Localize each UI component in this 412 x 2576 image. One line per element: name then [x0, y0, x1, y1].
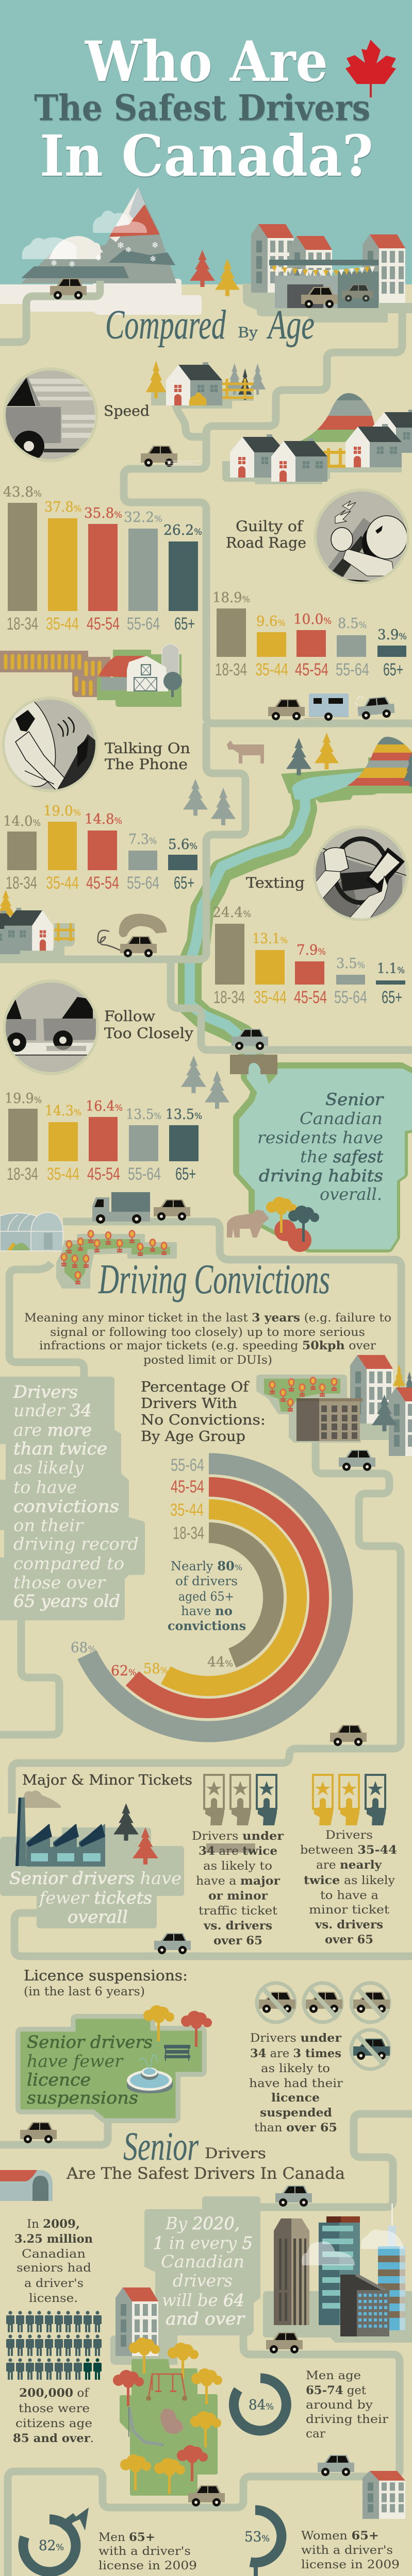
donut: 82 percent with male symbol: 82%	[39, 2538, 64, 2554]
text: drivers 35-44 tickets: to have a	[320, 1889, 378, 1902]
panel: drivers under 34: convictions	[13, 1496, 119, 1516]
radial bar chart: no convictions by age	[71, 1455, 342, 1732]
text: drivers under 34 tickets: vs. drivers	[203, 1919, 272, 1933]
bar chart: road rage: 10.0%	[293, 612, 332, 628]
bar chart: follow too closely	[5, 1091, 202, 1184]
bar chart: follow too closely: 16.4%	[86, 1098, 123, 1114]
heading: compared by age: Age	[266, 302, 315, 348]
callout: senior canadian residents: Canadian	[300, 1109, 383, 1128]
callout: senior canadian residents: residents have	[257, 1128, 383, 1147]
car with speed lines	[141, 446, 201, 467]
text: men age 65-74	[306, 2369, 389, 2441]
text: definition of convictions: Meaning any minor ticket in the last 3 years (e.g. failure to	[24, 1311, 391, 1325]
text: drivers under 34 suspensions: suspended	[260, 2106, 332, 2120]
callout: senior canadian residents: Senior	[325, 1090, 384, 1109]
panel: senior drivers fewer tickets	[0, 1827, 184, 1928]
bar chart: texting: 45-54	[294, 988, 327, 1007]
bar chart: follow too closely: 65+	[175, 1164, 196, 1184]
bridge	[230, 1055, 277, 1074]
grey car	[275, 2185, 312, 2207]
green bank at the hill	[281, 757, 412, 803]
panel: speed	[5, 369, 98, 462]
text: drivers under 34 tickets: or minor	[208, 1889, 268, 1903]
text: 200,000 of those: 85 and over.	[13, 2432, 94, 2445]
road platform under garage	[244, 284, 412, 321]
heading: compared by age: Compared	[105, 302, 226, 348]
donut: 53 percent with female symbol	[244, 2510, 282, 2576]
bar chart: talking on the phone: 14.8%	[85, 811, 122, 827]
bar chart: follow too closely: 13.5%	[166, 1107, 202, 1123]
garage	[269, 260, 378, 308]
text: drivers 35-44 tickets: over 65	[325, 1933, 373, 1946]
text: nearly 80 percent: convictions	[168, 1618, 246, 1633]
text: 200,000 of those: those were	[19, 2402, 90, 2415]
text: drivers 35-44 tickets: are nearly	[316, 1858, 382, 1872]
label: talking on the phone: The Phone	[105, 756, 188, 773]
label: follow too closely: Follow	[104, 1008, 155, 1025]
bar chart: follow too closely: 35-44	[47, 1164, 79, 1184]
panel: drivers under 34: are more	[13, 1420, 92, 1440]
text: drivers under 34 suspensions: Drivers under	[250, 2031, 341, 2045]
label: talking on the phone: Talking On	[105, 740, 190, 757]
label: texting: Texting	[246, 874, 305, 891]
text: nearly 80 percent: of drivers	[175, 1574, 238, 1588]
panel: road rage	[315, 490, 408, 585]
factory	[15, 1790, 255, 1867]
heading: compared by age: By	[238, 324, 258, 341]
bar chart: speed	[3, 484, 202, 634]
heading: senior drivers are the safest: Drivers	[205, 2145, 266, 2162]
lake	[239, 1061, 412, 1248]
snowy ground	[0, 279, 202, 315]
title: In Canada?	[40, 123, 373, 189]
icon: phone handset and car	[98, 914, 166, 957]
panel: drivers under 34: than twice	[13, 1438, 107, 1459]
heading: percentage of drivers: Percentage Of	[141, 1379, 250, 1395]
panel: by 2020: 1 in every 5	[153, 2233, 253, 2253]
heading: percentage of drivers: No Convictions:	[141, 1412, 266, 1428]
grey trees	[183, 779, 236, 825]
text: men 65+: with a driver's	[98, 2545, 191, 2558]
label: road rage	[226, 518, 306, 551]
text: drivers under 34 tickets: 34 are twice	[199, 1844, 277, 1858]
text: women 65+	[301, 2529, 400, 2571]
label: road rage: Guilty of	[236, 518, 304, 535]
text: men 65+: license in 2009	[98, 2560, 197, 2572]
text: definition of convictions: infractions or major tickets (e.g. speeding 50kph over	[39, 1339, 376, 1352]
bar chart: talking on the phone: 7.3%	[128, 832, 157, 848]
farm	[0, 644, 182, 707]
grey car	[154, 1933, 191, 1954]
bar chart: texting: 13.1%	[252, 931, 288, 947]
text: in 2009: Canadian	[22, 2248, 86, 2261]
callout: senior canadian residents	[257, 1090, 384, 1204]
callout: senior canadian residents: driving habits	[259, 1166, 383, 1185]
panel: follow too closely	[4, 981, 100, 1074]
panel: by 2020: By 2020,	[165, 2213, 240, 2233]
icon: maple leaf	[345, 40, 396, 97]
text: senior drivers fewer tickets: overall	[68, 1907, 128, 1927]
text: drivers 35-44 tickets: Drivers	[325, 1829, 373, 1842]
bar chart: texting	[212, 905, 405, 1007]
panel: drivers under 34: compared to	[13, 1553, 124, 1573]
bar chart: speed: 45-54	[87, 614, 120, 634]
icon: cow	[227, 740, 264, 764]
heading: major and minor tickets: Major & Minor Tickets	[22, 1772, 192, 1788]
callout: senior canadian residents: overall.	[320, 1184, 382, 1204]
bar chart: talking on the phone: 45-54	[86, 873, 119, 893]
text: men 65+: Men 65+	[98, 2531, 155, 2544]
text: in 2009: seniors had	[17, 2262, 91, 2275]
car on snow	[50, 278, 87, 299]
chart age labels: 18-34	[173, 1523, 204, 1543]
bar chart: talking on the phone: 55-64	[127, 873, 159, 893]
bar chart: road rage: 35-44	[255, 660, 288, 680]
bar chart: road rage: 55-64	[336, 660, 369, 680]
road vehicles row	[268, 693, 395, 721]
town cluster right	[256, 1355, 412, 1456]
river	[190, 777, 371, 1061]
panel backdrop for city	[263, 2291, 412, 2343]
bar chart: speed: 65+	[174, 614, 195, 634]
bar chart: texting: 18-34	[213, 988, 245, 1007]
mountain scene: ❄	[125, 245, 132, 255]
chart age labels: 55-64	[171, 1455, 204, 1475]
text: drivers under 34 suspensions: 34 are 3 times	[250, 2047, 341, 2060]
text: women 65+: with a driver's	[301, 2544, 393, 2557]
bar chart: speed: 35.8%	[84, 505, 122, 521]
heading: percentage of drivers: Drivers With	[141, 1396, 237, 1412]
label: follow too closely	[104, 1008, 193, 1042]
truck and car	[92, 1192, 190, 1224]
bar chart: talking on the phone	[3, 803, 197, 893]
heading: licence suspensions: (in the last 6 years)	[24, 1985, 145, 1998]
panel: drivers under 34: 65 years old	[13, 1591, 120, 1611]
heading: senior drivers are the safest: Senior	[123, 2124, 199, 2168]
title: Who Are	[85, 29, 328, 94]
heading: licence suspensions	[24, 1967, 188, 1998]
panel: drivers under 34: as likely	[13, 1458, 84, 1478]
text: drivers under 34 tickets: over 65	[213, 1934, 262, 1947]
mountain scene: ❄	[95, 253, 102, 263]
bar chart: texting: 3.5%	[336, 956, 365, 972]
label: speed: Speed	[104, 402, 150, 419]
label: road rage: Road Rage	[226, 534, 306, 551]
mountain scene	[21, 187, 176, 283]
panel: drivers under 34: under 34	[13, 1400, 92, 1420]
panel: by 2020: and over	[166, 2309, 245, 2329]
bar chart: road rage: 9.6%	[256, 614, 286, 630]
text: drivers under 34 suspensions: licence	[271, 2091, 320, 2105]
city skyline	[274, 2204, 405, 2336]
heading: percentage of drivers	[141, 1379, 266, 1445]
bar chart: speed: 43.8%	[3, 484, 42, 500]
mountain scene: ❄	[117, 241, 124, 251]
text: drivers 35-44 tickets: between 35-44	[300, 1843, 397, 1857]
bar chart: talking on the phone: 18-34	[6, 873, 37, 893]
mountain scene: ❄	[152, 240, 158, 250]
panel: drivers under 34: to have	[13, 1477, 77, 1497]
bar chart: road rage	[212, 590, 407, 680]
text: men age 65-74: Men age	[306, 2369, 361, 2382]
text: drivers under 34 tickets	[192, 1829, 284, 1947]
text: senior drivers fewer tickets: Senior drivers have	[9, 1868, 182, 1888]
heading: licence suspensions: Licence suspensions:	[24, 1967, 188, 1984]
bar chart: texting: 7.9%	[296, 942, 326, 958]
panel: drivers under 34: on their	[13, 1515, 84, 1535]
title: The Safest Drivers	[34, 88, 370, 129]
trees beside the mountain	[190, 250, 240, 296]
text: women 65+: Women 65+	[301, 2529, 379, 2543]
text: drivers under 34 tickets: Drivers under	[192, 1829, 284, 1843]
callout: senior canadian residents: the safest	[300, 1147, 383, 1166]
text: drivers under 34 tickets: traffic ticket	[199, 1905, 277, 1918]
text: senior drivers fewer licence suspensions: suspensions	[27, 2088, 138, 2108]
tall house	[362, 2471, 405, 2519]
text: drivers under 34 tickets: have a major	[196, 1874, 280, 1888]
panel: by 2020: Canadian	[161, 2251, 244, 2272]
tan car	[20, 2122, 57, 2143]
grey trees near lake	[181, 1056, 229, 1109]
title	[34, 29, 373, 189]
panel: by 2020: will be 64	[162, 2290, 244, 2310]
text: nearly 80 percent	[168, 1558, 246, 1633]
heading: senior drivers are the safest: Are The Safest Drivers In Canada	[66, 2164, 345, 2183]
lake trees and bear	[227, 1197, 319, 1252]
bar chart: texting: 65+	[382, 988, 402, 1007]
grey car over bridge	[232, 1029, 268, 1050]
trees and hill at river head	[286, 733, 412, 787]
text: senior drivers fewer licence suspensions: licence	[27, 2070, 91, 2090]
icons: ticket hands under 34	[204, 1775, 277, 1825]
sky	[0, 0, 412, 284]
chart age labels: 62%	[111, 1663, 137, 1679]
text: definition of convictions: posted limit or DUIs)	[143, 1354, 272, 1367]
bar chart: texting: 55-64	[334, 988, 367, 1007]
bar chart: talking on the phone: 19.0%	[43, 803, 81, 819]
bar chart: road rage: 8.5%	[338, 616, 367, 632]
panel: drivers under 34: driving record	[13, 1534, 139, 1554]
bar chart: road rage: 3.9%	[377, 627, 407, 643]
icons: ticket hands 35-44	[313, 1775, 386, 1825]
bar chart: talking on the phone: 65+	[174, 873, 194, 893]
panel: talking on the phone	[2, 697, 98, 792]
bar chart: road rage: 65+	[383, 660, 403, 680]
pictogram: people	[6, 2311, 102, 2380]
text: nearly 80 percent: have no	[181, 1603, 233, 1618]
tall house by park	[116, 2287, 158, 2356]
bar chart: road rage: 45-54	[295, 660, 328, 680]
panel: drivers under 34	[0, 1377, 145, 1620]
text: senior drivers fewer tickets: fewer tickets	[38, 1888, 152, 1908]
text: drivers under 34 suspensions: than over 65	[254, 2121, 337, 2134]
heading: senior drivers are the safest	[66, 2124, 345, 2183]
bar chart: follow too closely: 55-64	[128, 1164, 161, 1184]
bar chart: follow too closely: 19.9%	[5, 1091, 42, 1107]
text: drivers under 34 suspensions: have had their	[249, 2077, 343, 2090]
text: nearly 80 percent: aged 65+	[178, 1589, 234, 1604]
mountain scene: ❄	[51, 258, 57, 268]
left houses	[0, 890, 75, 957]
donut: 84 percent: 84%	[249, 2397, 274, 2413]
bar chart: speed: 32.2%	[124, 510, 162, 526]
text: in 2009: a driver's	[24, 2277, 84, 2290]
donut: 82 percent with male symbol	[23, 2507, 89, 2572]
mountain scene: ❄	[69, 259, 75, 269]
panel: drivers under 34: Drivers	[13, 1382, 78, 1402]
text: definition of convictions	[24, 1311, 391, 1367]
house and trees near speed	[146, 361, 266, 409]
text: senior drivers fewer licence suspensions: have fewer	[27, 2051, 124, 2071]
park	[113, 2337, 222, 2494]
text: senior drivers fewer licence suspensions: Senior drivers	[27, 2032, 153, 2052]
greenhouse	[0, 1212, 63, 1251]
text: in 2009	[14, 2217, 93, 2305]
mountain scene: ❄	[150, 254, 156, 264]
text: men age 65-74: driving their	[306, 2413, 389, 2426]
text: women 65+: license in 2009	[301, 2558, 400, 2571]
panel: by 2020	[110, 2196, 260, 2365]
label: talking on the phone	[105, 740, 190, 773]
text: drivers under 34 tickets: as likely to	[203, 1860, 272, 1873]
text: in 2009: In 2009,	[27, 2217, 80, 2231]
bar chart: texting: 35-44	[254, 988, 287, 1007]
cars on lower road	[188, 2455, 354, 2506]
bar chart: talking on the phone: 14.0%	[3, 814, 41, 829]
panel: texting	[315, 827, 407, 922]
bar chart: speed: 18-34	[7, 614, 38, 634]
park panel	[21, 2005, 212, 2117]
text: men 65+	[98, 2531, 197, 2572]
text: drivers 35-44 tickets	[300, 1829, 397, 1946]
bar chart: texting: 24.4%	[212, 905, 251, 921]
text: definition of convictions: signal or following too closely) up to more serious	[50, 1326, 365, 1339]
bar chart: road rage: 18-34	[215, 660, 247, 680]
hill and houses right	[222, 392, 412, 484]
top town buildings	[251, 224, 405, 304]
text: drivers under 34 suspensions: as likely to	[261, 2062, 330, 2075]
bar chart: speed: 55-64	[127, 614, 160, 634]
bar chart: road rage: 18.9%	[212, 590, 250, 606]
chart age labels: 35-44	[170, 1500, 204, 1520]
tan car	[266, 2332, 303, 2353]
panel: by 2020: drivers	[173, 2270, 233, 2291]
tunnel building	[0, 2170, 53, 2201]
text: in 2009: license.	[29, 2292, 78, 2305]
bar chart: follow too closely: 13.5%	[126, 1107, 161, 1123]
donut: 84 percent	[234, 2378, 286, 2431]
label: follow too closely: Too Closely	[104, 1025, 193, 1042]
bar chart: texting: 1.1%	[377, 961, 405, 977]
text: 200,000 of those: citizens age	[15, 2417, 92, 2430]
text: drivers 35-44 tickets: minor ticket	[309, 1904, 389, 1917]
chart age labels: 58%	[143, 1661, 168, 1677]
bar chart: speed: 26.2%	[163, 522, 202, 538]
chart age labels: 44%	[207, 1654, 233, 1670]
flower garden	[58, 1230, 175, 1287]
text: senior drivers fewer licence suspensions	[27, 2032, 153, 2108]
heading: percentage of drivers: By Age Group	[141, 1429, 245, 1445]
icons: no-car signs	[257, 1983, 390, 2069]
grey car	[339, 1450, 375, 1471]
panel: drivers under 34: those over	[13, 1572, 106, 1592]
text: drivers 35-44 tickets: vs. drivers	[315, 1918, 383, 1931]
text: 200,000 of those: 200,000 of	[19, 2386, 90, 2400]
text: nearly 80 percent: Nearly 80%	[171, 1558, 242, 1573]
chart age labels: 68%	[71, 1640, 96, 1656]
bar chart: speed: 35-44	[46, 614, 79, 634]
donut: 53 percent with female symbol: 53%	[244, 2529, 270, 2545]
text: men age 65-74: around by	[306, 2399, 373, 2412]
bar chart: follow too closely: 14.3%	[45, 1103, 81, 1119]
chart age labels: 45-54	[171, 1477, 204, 1497]
bar chart: follow too closely: 45-54	[87, 1164, 120, 1184]
bar chart: speed: 37.8%	[44, 499, 81, 515]
river water top	[292, 772, 363, 800]
text: men age 65-74: car	[306, 2428, 325, 2441]
text: drivers under 34 suspensions	[249, 2031, 343, 2134]
chart age labels	[71, 1455, 233, 1679]
text: 200,000 of those	[13, 2386, 94, 2445]
bar chart: talking on the phone: 35-44	[46, 873, 79, 893]
bar chart: talking on the phone: 5.6%	[168, 837, 197, 853]
text: men age 65-74: 65-74 get	[306, 2384, 366, 2397]
text: senior drivers fewer tickets	[9, 1868, 182, 1927]
text: in 2009: 3.25 million	[14, 2232, 93, 2246]
text: drivers 35-44 tickets: twice as likely	[304, 1874, 395, 1887]
bar chart: follow too closely: 18-34	[7, 1164, 38, 1184]
tan car	[330, 1725, 367, 1746]
